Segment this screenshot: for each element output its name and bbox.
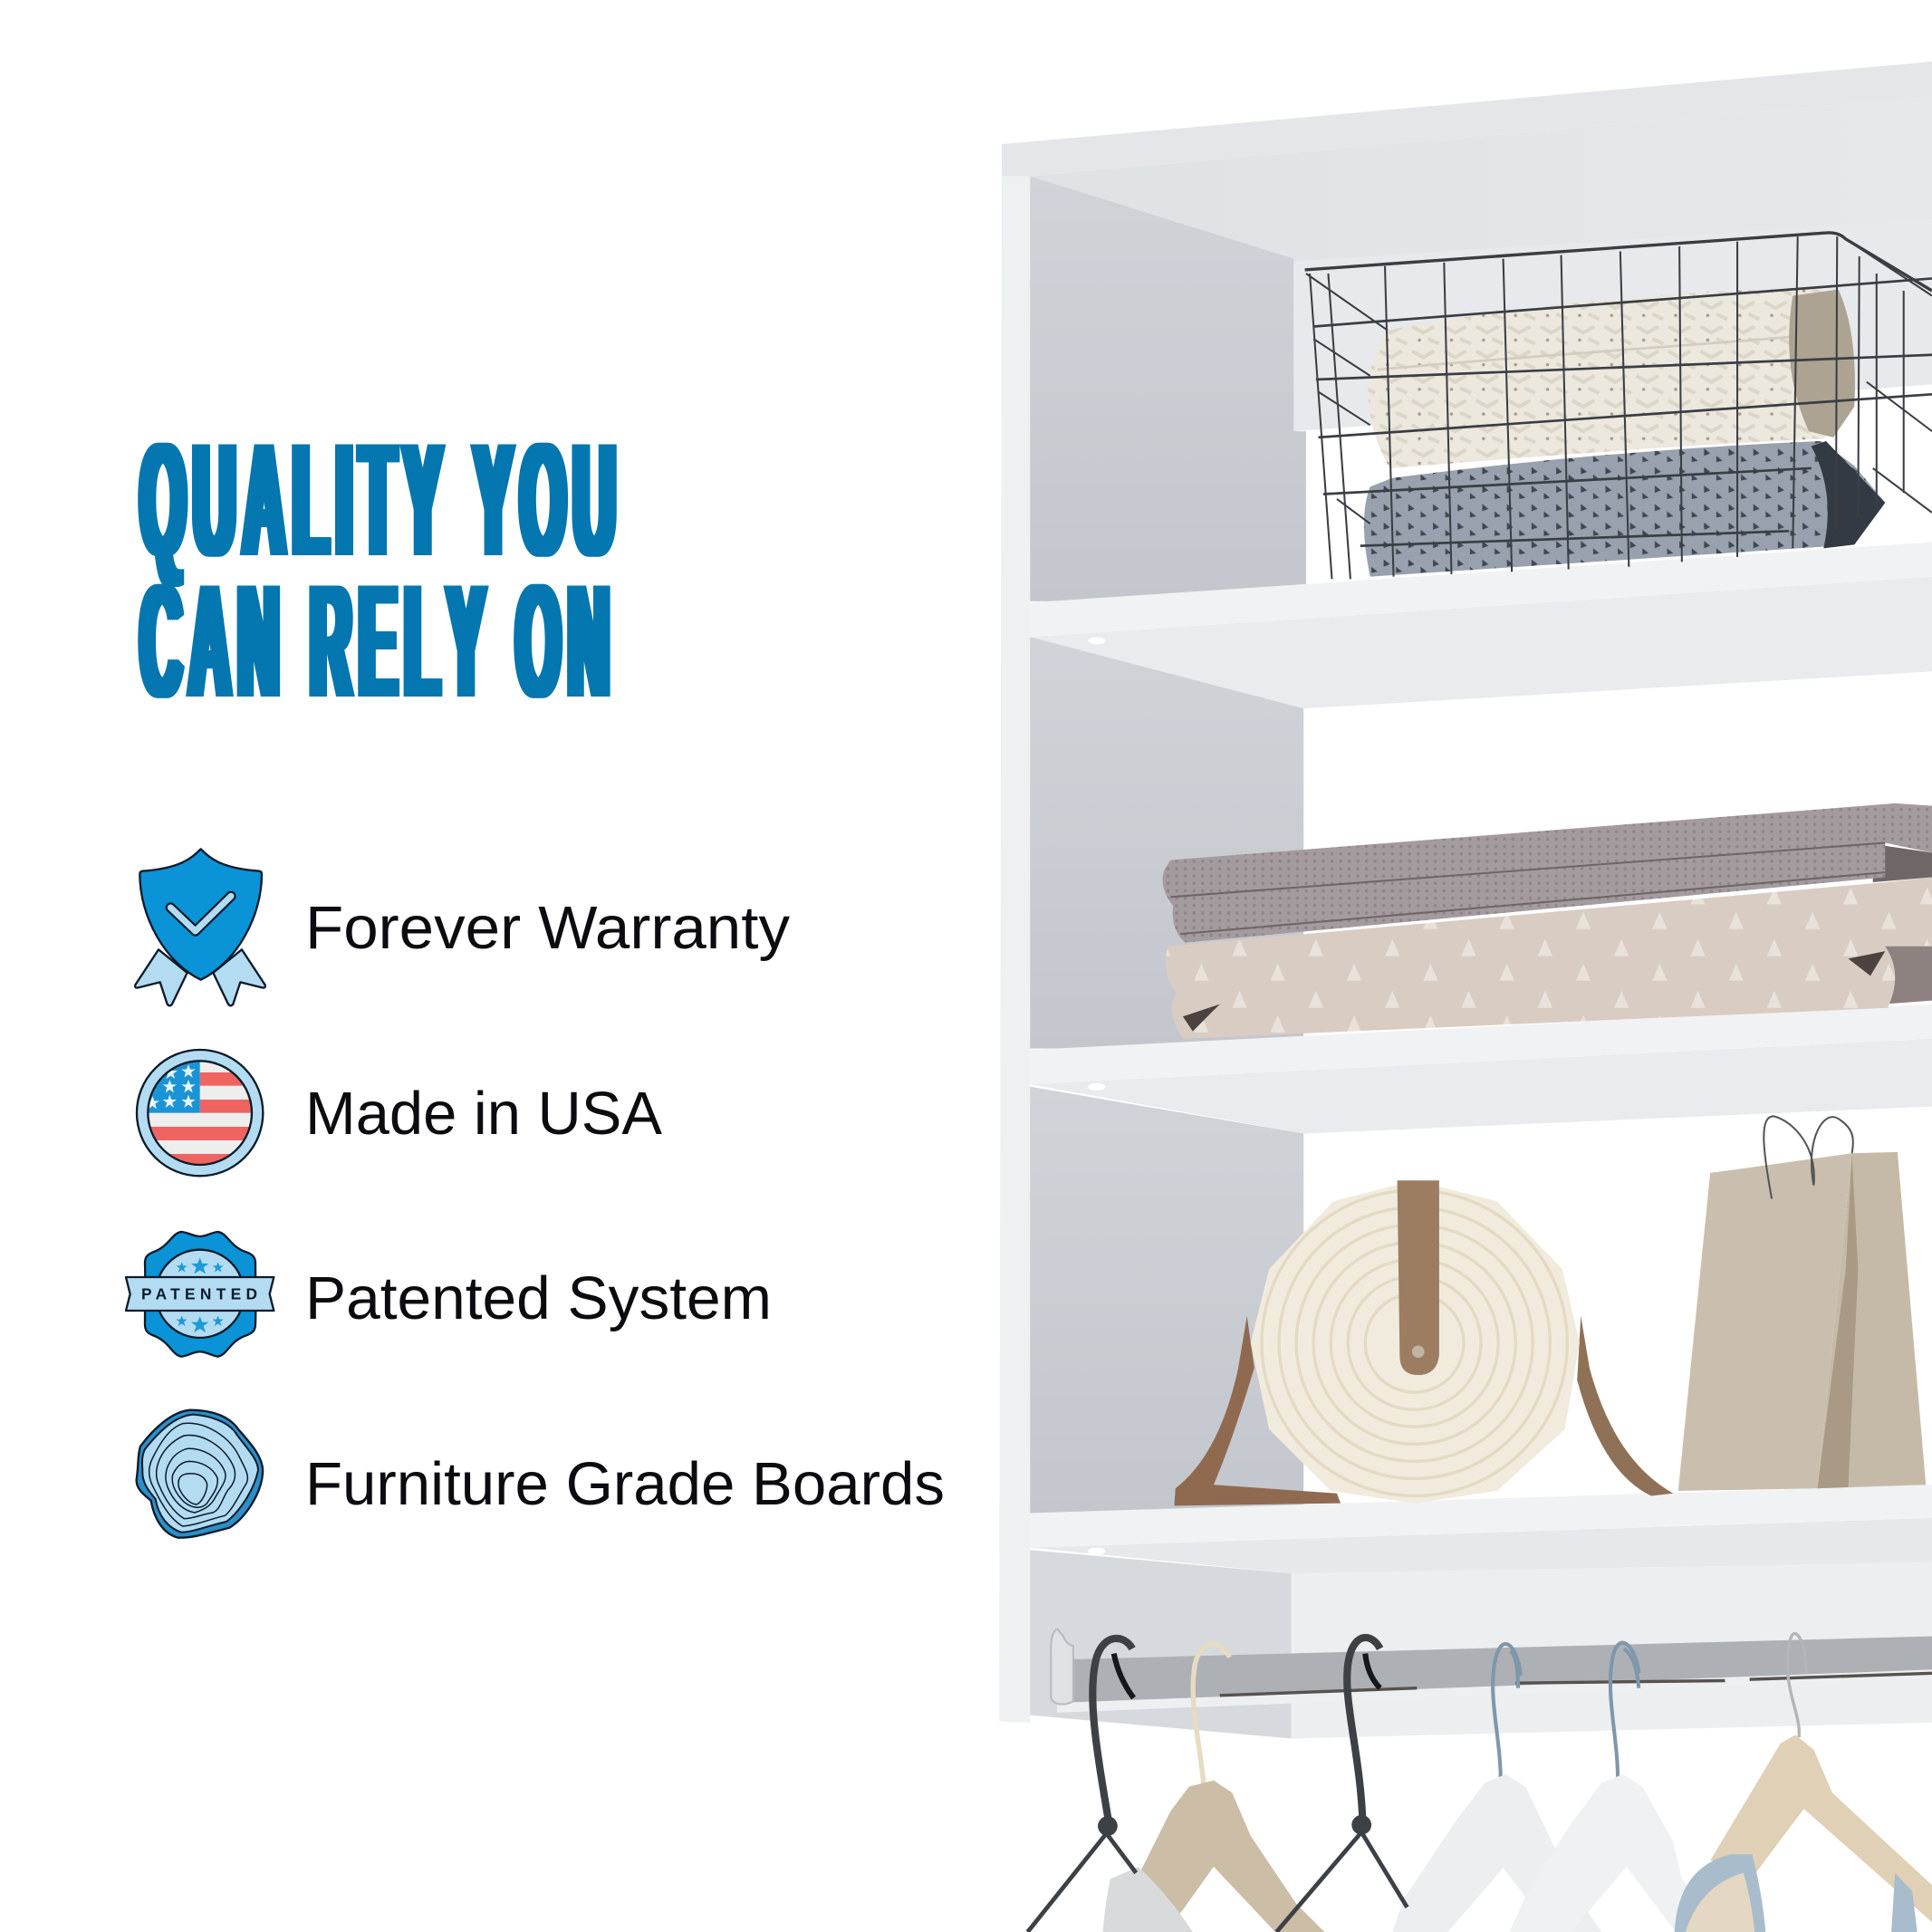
cream hanger: [1134, 1644, 1324, 1932]
panel: second shelf underside: [1030, 1039, 1932, 1134]
round woven bag: [1174, 1180, 1673, 1505]
wavy seal: [145, 1232, 255, 1357]
text: Patented System: Patented System: [305, 1264, 772, 1332]
basket with blankets: [1305, 233, 1932, 579]
dark hanger right: [1276, 1638, 1407, 1932]
text: Forever Warranty: Forever Warranty: [305, 894, 791, 962]
panel: second shelf: [1030, 1004, 1932, 1084]
closet shelving unit: [999, 62, 1932, 1932]
hanging rail: [1051, 1629, 1932, 1713]
wire basket: [1305, 233, 1932, 579]
paper shopping bag: [1678, 1116, 1926, 1491]
screw holes: [1088, 637, 1105, 1555]
panel: lower back board: [1292, 1562, 1932, 1738]
banner text: PATENTED: [141, 1285, 257, 1303]
title: QUALITY YOU: [140, 409, 623, 590]
banner: [126, 1277, 274, 1311]
bag side straps: [1174, 1316, 1341, 1505]
panel: third side wall: [1030, 1087, 1303, 1513]
shadowed lower blanket end: [1885, 946, 1932, 1004]
grey blanket: [1364, 441, 1885, 577]
check mark: [170, 896, 231, 931]
icon: shield with check and ribbons: [135, 849, 265, 1005]
icon: patented seal: [126, 1232, 274, 1357]
panel: top board: [1002, 62, 1932, 177]
panel: side board front edge: [999, 144, 1030, 1723]
hangers: [1028, 1634, 1932, 1932]
title: [138, 409, 623, 731]
text: Made in USA: Made in USA: [305, 1080, 662, 1148]
panel: top underside: [1030, 96, 1932, 263]
flag stars: [146, 1064, 196, 1109]
panel: upper back board: [1293, 219, 1932, 431]
grey garment: [1102, 1867, 1193, 1932]
inner wood: [142, 1415, 258, 1533]
text: Furniture Grade Boards: Furniture Grade Boards: [305, 1450, 945, 1518]
bag flap strap: [1398, 1180, 1439, 1375]
flag stripes and canton: [145, 1060, 257, 1168]
cream blanket end: [1789, 290, 1855, 437]
panel: second side wall: [1030, 637, 1303, 1049]
wooden hanger: [1710, 1634, 1932, 1922]
beige patterned blanket: [1166, 878, 1932, 1039]
outer bark: [137, 1410, 263, 1538]
panel: third shelf underside: [1030, 1518, 1932, 1573]
title: CAN RELY ON: [140, 551, 617, 731]
icon: American flag badge: [137, 1050, 263, 1176]
icon: wood rings: [137, 1410, 263, 1538]
bag body: [1251, 1180, 1580, 1504]
shadowed upper blanket end: [1873, 844, 1932, 882]
cream blanket: [1368, 289, 1852, 468]
folded blankets: [1163, 803, 1932, 1039]
right garment: [1891, 1873, 1918, 1932]
ribbon tails: [135, 949, 265, 1005]
white hanger left: [1392, 1644, 1601, 1932]
panel: first shelf: [1030, 543, 1932, 637]
panel: fourth side wall: [1030, 1550, 1292, 1738]
dark hanger left: [1028, 1639, 1136, 1932]
panel: first shelf underside: [1030, 577, 1932, 708]
shield: [139, 849, 262, 980]
growth rings: [149, 1423, 247, 1526]
white hanger right: [1509, 1641, 1687, 1932]
panel: third shelf: [1030, 1485, 1932, 1548]
blue garment strap: [1675, 1854, 1765, 1932]
panel: upper side wall: [1030, 177, 1306, 601]
mauve folded blanket: [1163, 803, 1932, 943]
seal stars: [177, 1258, 224, 1332]
inner circle: [156, 1250, 244, 1338]
